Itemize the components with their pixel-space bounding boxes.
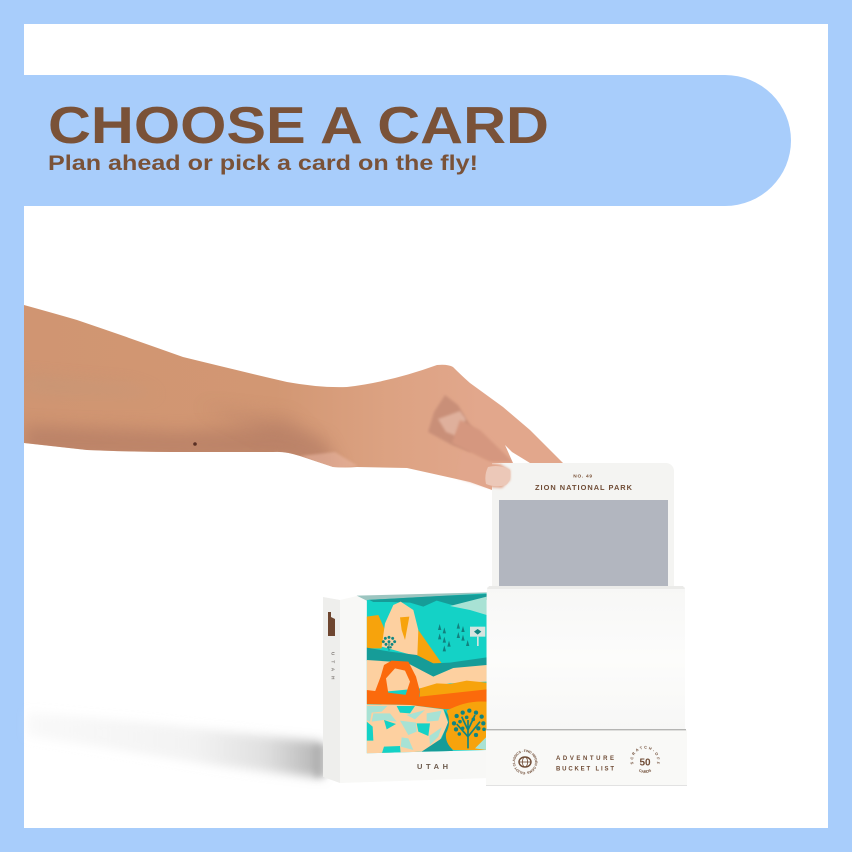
small tree (382, 636, 396, 651)
lower river (422, 709, 453, 752)
card number: NO. 49 (573, 474, 593, 480)
box band (486, 730, 687, 785)
box front (487, 587, 685, 730)
left orange hill (367, 615, 385, 648)
scratch-off panel (499, 500, 668, 588)
scratch card (492, 463, 674, 590)
banner shape (24, 75, 791, 206)
band bottom edge (486, 785, 687, 786)
subtitle: Plan ahead or pick a card on the fly! (48, 152, 478, 175)
pine trees (438, 623, 469, 651)
Utah card pack (314, 592, 490, 783)
badge: 50 scratch-off cards: CARDS (639, 769, 652, 774)
lower mosaic (367, 704, 448, 754)
sky and mountains (367, 593, 487, 753)
lower right hill (446, 701, 487, 750)
right orange slope (417, 630, 442, 663)
thumb (458, 452, 510, 488)
pack side shadow (314, 745, 326, 777)
spine label: UTAH (330, 652, 336, 684)
orange band (367, 689, 487, 709)
landscape illustration (357, 592, 487, 754)
badge: enjoy classics: ENJOY CLASSICS · FIND HIDDEN GEMS · (512, 750, 538, 774)
floor shadow (27, 712, 323, 778)
brand name: ADVENTURE (556, 756, 614, 762)
skin shading (24, 396, 511, 468)
title: CHOOSE A CARD (48, 97, 549, 155)
arm and hand silhouette (24, 305, 563, 490)
brand mark on spine (328, 612, 335, 636)
thumb tip (458, 452, 510, 488)
pack lid interior (357, 592, 487, 601)
gap between fingers (505, 445, 530, 463)
card box (486, 586, 687, 786)
large tree (452, 709, 486, 748)
card title: ZION NATIONAL PARK (535, 483, 633, 492)
brand name: BUCKET LIST (556, 766, 614, 772)
arm and hand (24, 305, 563, 490)
header banner (24, 75, 791, 206)
pack label: UTAH (417, 762, 452, 771)
middle amber band (420, 681, 487, 698)
mole (193, 442, 197, 446)
middle peach band (367, 660, 487, 693)
pack spine (323, 597, 340, 783)
teal river (367, 648, 487, 677)
badge: 50 scratch-off cards: 50 (639, 758, 651, 768)
badge: 50 scratch-off cards (630, 746, 660, 774)
park sign (470, 627, 485, 646)
band shadow line (486, 729, 686, 730)
badge: 50 scratch-off cards: SCRATCH-OFF (630, 746, 660, 764)
rock alcove (400, 617, 409, 640)
arch (375, 660, 420, 697)
brand name (556, 756, 614, 772)
card body (492, 463, 674, 590)
box top edge (487, 586, 685, 589)
thumbnail (485, 466, 510, 486)
pack front (340, 592, 490, 783)
peach rock (382, 602, 420, 657)
